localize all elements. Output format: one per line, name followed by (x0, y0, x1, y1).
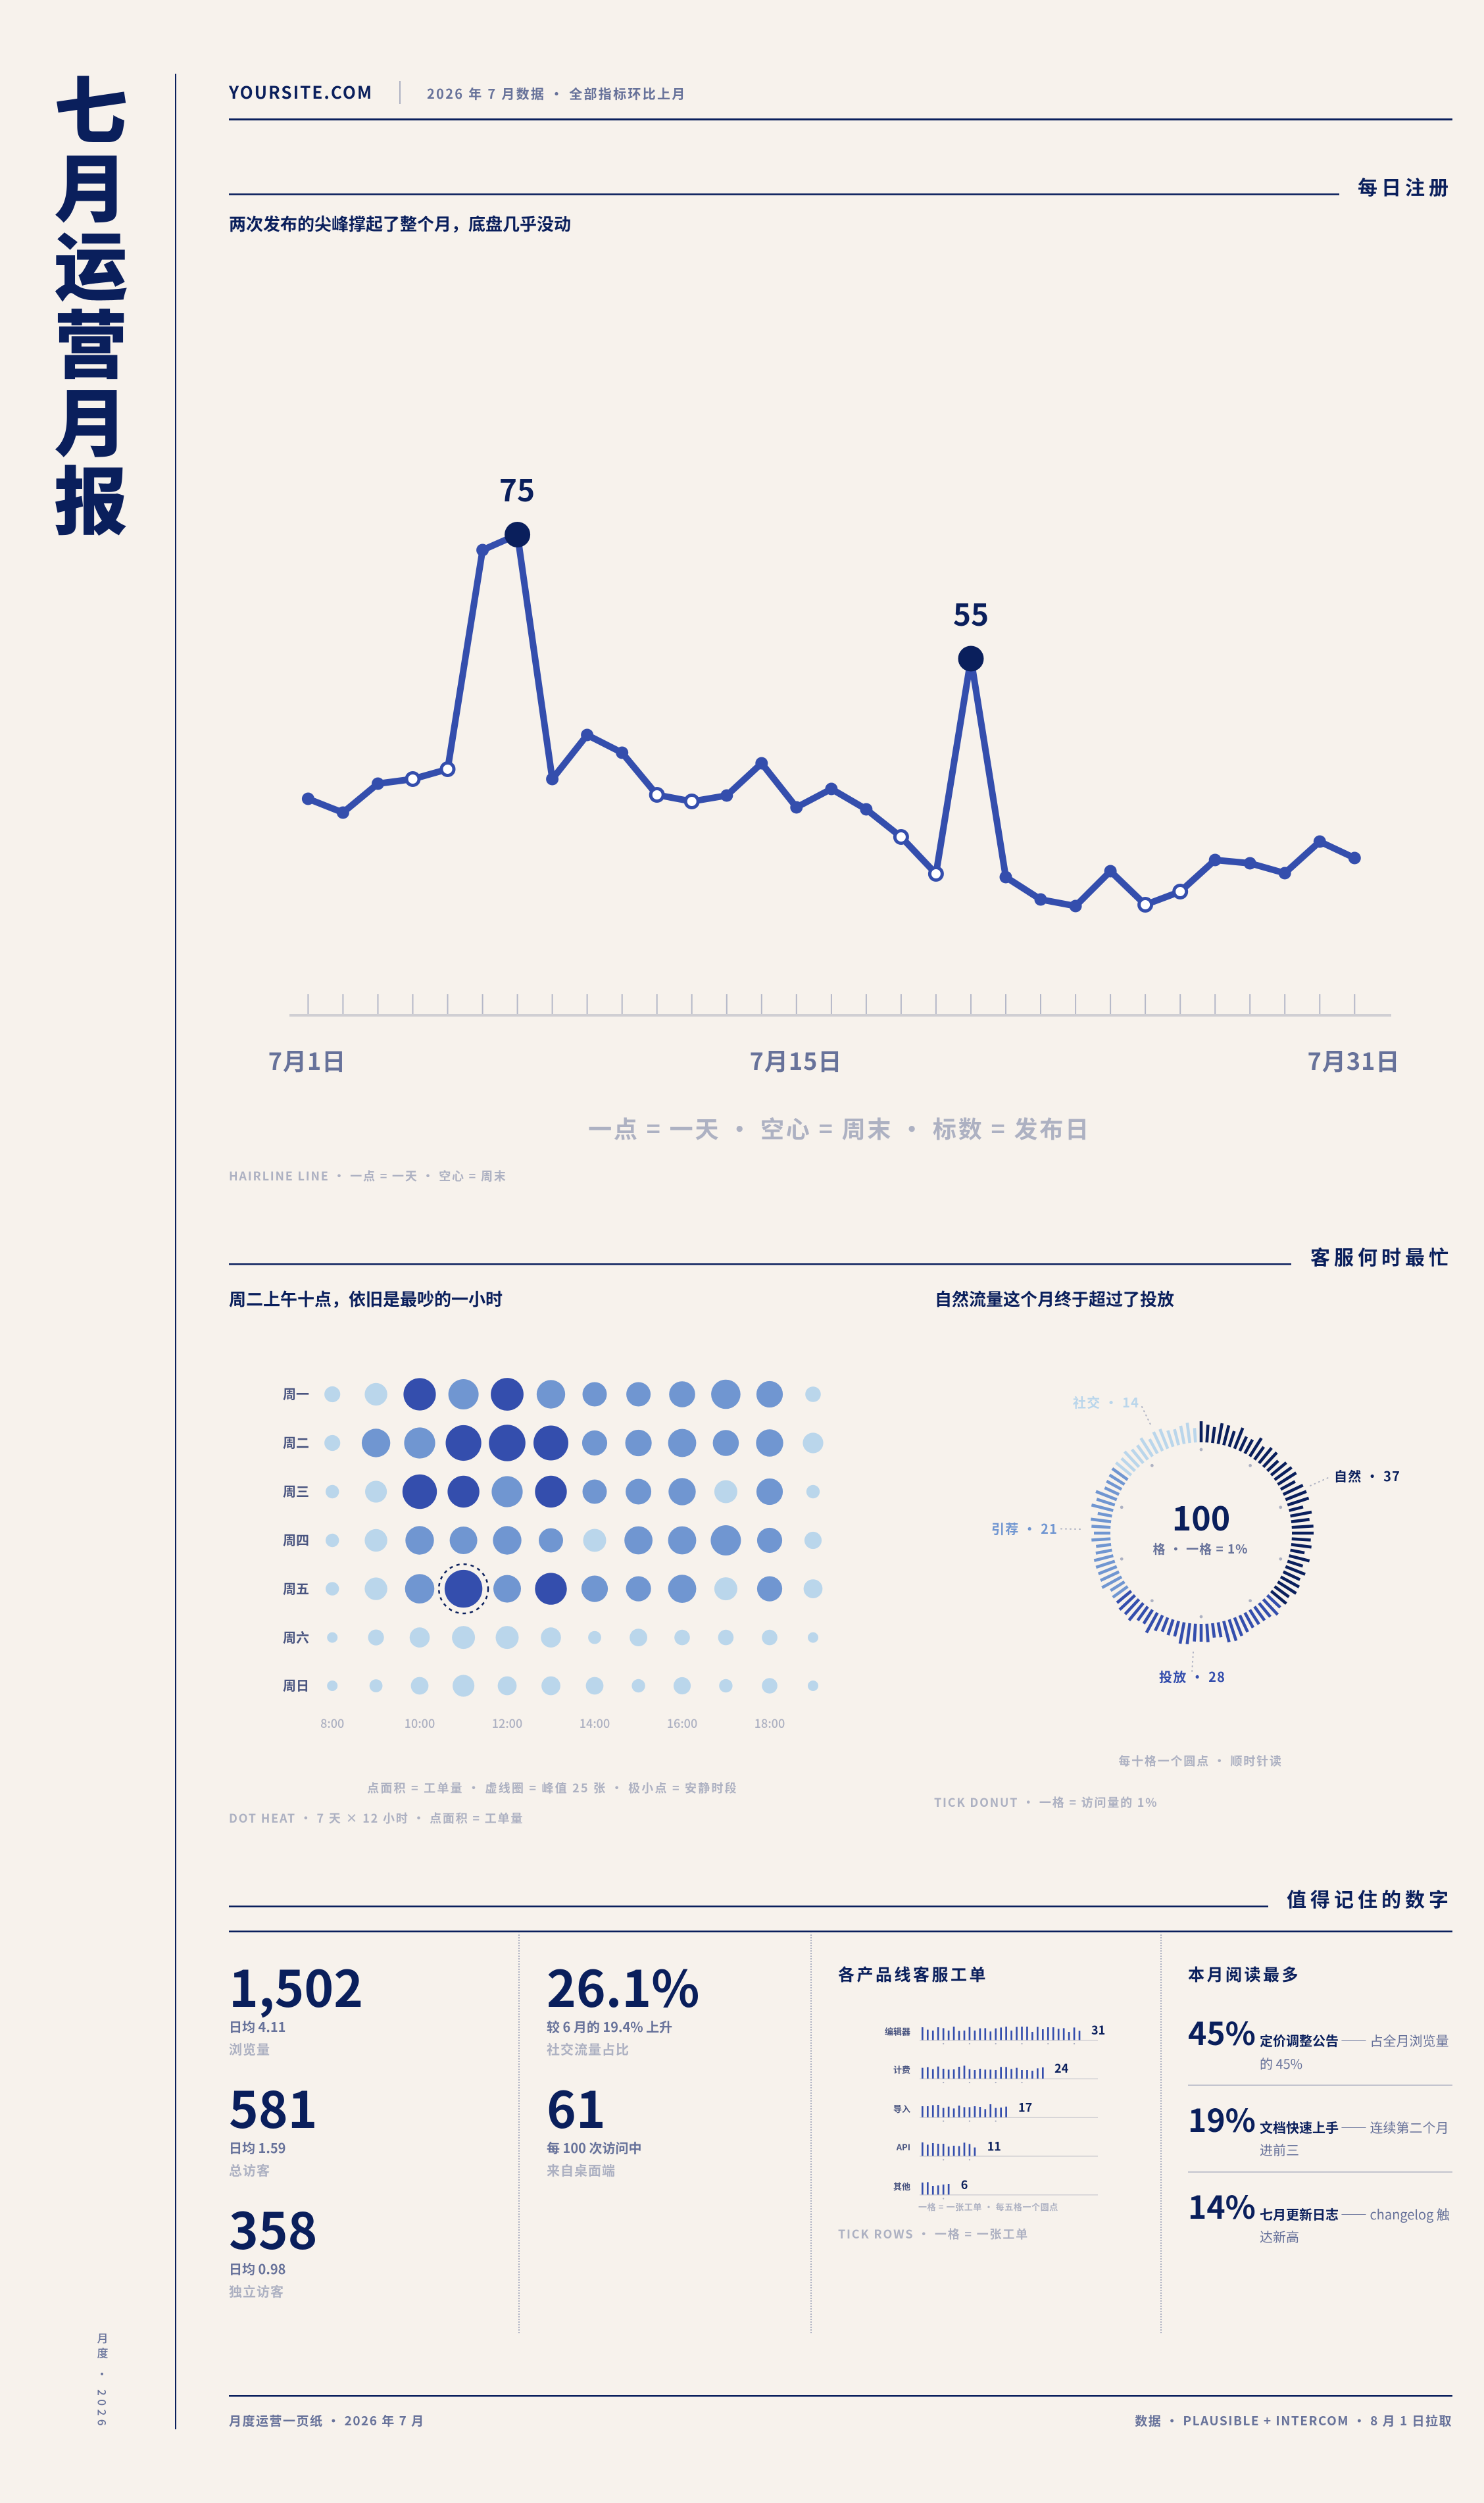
tickets by product tick rows: 其他 (893, 2180, 910, 2192)
timeline axis: 7月15日 (750, 1043, 842, 1077)
section heading: key numbers: 值得记住的数字 (1287, 1884, 1452, 1913)
footer (229, 2395, 1452, 2429)
dot heatmap: 周一 (283, 1384, 309, 1403)
dot heatmap: 16:00 (667, 1715, 697, 1732)
header rule (229, 118, 1452, 120)
dot heatmap: 周六 (283, 1627, 309, 1646)
tickets by product tick rows: 24 (1054, 2060, 1069, 2077)
line chart (302, 467, 1361, 912)
timeline axis: 7月31日 (1308, 1043, 1400, 1077)
stat column two: 来自桌面端 (547, 2160, 616, 2179)
title: 七月运营月报 (37, 72, 144, 542)
panel: numbers worth remembering (229, 1884, 1452, 2333)
tick donut: 引荐 · 21 (991, 1519, 1058, 1538)
dot heatmap: 14:00 (580, 1715, 610, 1732)
stat column two (547, 1949, 699, 2179)
tick donut (991, 1392, 1400, 1686)
stat column two: 61 (547, 2070, 606, 2142)
most read item one (1188, 2008, 1448, 2073)
tick donut: 100 (1172, 1493, 1230, 1540)
tickets by product tick rows: 31 (1091, 2021, 1105, 2038)
most read item three: —— changelog 触 (1341, 2204, 1450, 2223)
most read item one: 定价调整公告 (1260, 2031, 1339, 2050)
most read list (1188, 1962, 1452, 2246)
stat column one: 总访客 (229, 2160, 270, 2179)
header meta: 2026 年 7 月数据 · 全部指标环比上月 (427, 84, 687, 103)
stat column one: 358 (229, 2191, 318, 2263)
tickets by product tick rows: API (896, 2140, 910, 2153)
heatmap caption: DOT HEAT · 7 天 × 12 小时 · 点面积 = 工单量 (229, 1809, 524, 1827)
stat column one: 日均 1.59 (229, 2138, 285, 2157)
tickets by product tick rows (838, 1962, 1105, 2242)
most read item two (1188, 2095, 1448, 2159)
most read item three: 七月更新日志 (1260, 2204, 1339, 2223)
heatmap note: 点面积 = 工单量 · 虚线圈 = 峰值 25 张 · 极小点 = 安静时段 (367, 1779, 738, 1796)
left spine (37, 72, 176, 2429)
chart subtitle: 两次发布的尖峰撑起了整个月，底盘几乎没动 (229, 211, 571, 236)
tickets by product tick rows: 计费 (893, 2063, 910, 2075)
most read item three (1188, 2182, 1450, 2246)
timeline axis: 7月1日 (268, 1043, 346, 1077)
donut caption: TICK DONUT · 一格 = 访问量的 1% (934, 1794, 1158, 1811)
footer left text: 月度运营一页纸 · 2026 年 7 月 (229, 2412, 425, 2429)
most read item one: 45% (1188, 2008, 1256, 2054)
tickets by product tick rows: 各产品线客服工单 (838, 1962, 988, 1986)
chart legend note: 一点 = 一天 · 空心 = 周末 · 标数 = 发布日 (588, 1111, 1091, 1145)
stat column two: 每 100 次访问中 (547, 2138, 641, 2157)
header separator (399, 81, 401, 104)
dot heatmap: 周三 (283, 1481, 309, 1500)
tickets by product tick rows: 编辑器 (885, 2025, 910, 2037)
line chart: 55 (953, 592, 989, 635)
spine caption: 月度 · 2026 (95, 2333, 111, 2429)
tick donut: 投放 · 28 (1159, 1667, 1225, 1686)
section heading: daily signups: 每日注册 (1358, 172, 1452, 201)
timeline axis (268, 994, 1400, 1077)
stat column one: 581 (229, 2070, 318, 2142)
line chart: 75 (499, 467, 535, 511)
tickets by product tick rows: 一格 = 一张工单 · 每五格一个圆点 (918, 2200, 1058, 2213)
stat column one: 日均 0.98 (229, 2259, 285, 2278)
tick donut: 格 · 一格 = 1% (1153, 1540, 1248, 1557)
tick donut: 社交 · 14 (1073, 1392, 1139, 1411)
tick donut: 自然 · 37 (1334, 1466, 1400, 1485)
dot heatmap: 周日 (283, 1675, 309, 1694)
panel: support busy hours (229, 1242, 1452, 1827)
stat column two: 26.1% (547, 1949, 699, 2021)
chart caption: HAIRLINE LINE · 一点 = 一天 · 空心 = 周末 (229, 1167, 507, 1184)
stat column one: 日均 4.11 (229, 2017, 285, 2036)
most read item one: —— 占全月浏览量 (1341, 2031, 1448, 2050)
most read item two: 进前三 (1260, 2140, 1299, 2159)
tickets by product tick rows: TICK ROWS · 一格 = 一张工单 (838, 2225, 1029, 2242)
most read item two: 19% (1188, 2095, 1256, 2141)
donut subtitle: 自然流量这个月终于超过了投放 (935, 1286, 1174, 1311)
tickets by product tick rows: 11 (987, 2137, 1001, 2154)
most read list: 本月阅读最多 (1188, 1962, 1300, 1986)
section heading: support hours: 客服何时最忙 (1310, 1242, 1452, 1271)
dot heatmap subtitle: 周二上午十点，依旧是最吵的一小时 (229, 1286, 503, 1311)
stat column two: 较 6 月的 19.4% 上升 (547, 2017, 672, 2036)
stat column one (229, 1949, 363, 2300)
dot heatmap: 12:00 (492, 1715, 522, 1732)
donut note: 每十格一个圆点 · 顺时针读 (1118, 1752, 1283, 1769)
dot heatmap: 周五 (283, 1579, 309, 1598)
stat column one: 1,502 (229, 1949, 363, 2021)
stat column one: 浏览量 (229, 2039, 270, 2058)
footer right text: 数据 · PLAUSIBLE + INTERCOM · 8 月 1 日拉取 (1135, 2412, 1452, 2429)
stat column two: 社交流量占比 (547, 2039, 630, 2058)
most read item three: 14% (1188, 2182, 1256, 2228)
dot heatmap: 18:00 (754, 1715, 785, 1732)
site name: YOURSITE.COM (228, 80, 373, 104)
most read item three: 达新高 (1260, 2227, 1299, 2246)
dot heatmap (283, 1378, 824, 1732)
most read item two: 文档快速上手 (1260, 2117, 1339, 2136)
dot heatmap: 10:00 (405, 1715, 435, 1732)
dot heatmap: 周四 (283, 1530, 309, 1549)
spine rule (175, 74, 176, 2429)
dot heatmap: 周二 (283, 1432, 309, 1452)
stat column one: 独立访客 (229, 2281, 284, 2300)
panel: daily signups (229, 172, 1452, 1184)
header (228, 80, 1452, 120)
dot heatmap: 8:00 (320, 1715, 344, 1732)
tickets by product tick rows: 导入 (893, 2102, 910, 2115)
tickets by product tick rows: 17 (1018, 2098, 1032, 2115)
most read item two: —— 连续第二个月 (1341, 2117, 1448, 2136)
most read item one: 的 45% (1260, 2054, 1302, 2073)
tickets by product tick rows: 6 (961, 2176, 968, 2193)
